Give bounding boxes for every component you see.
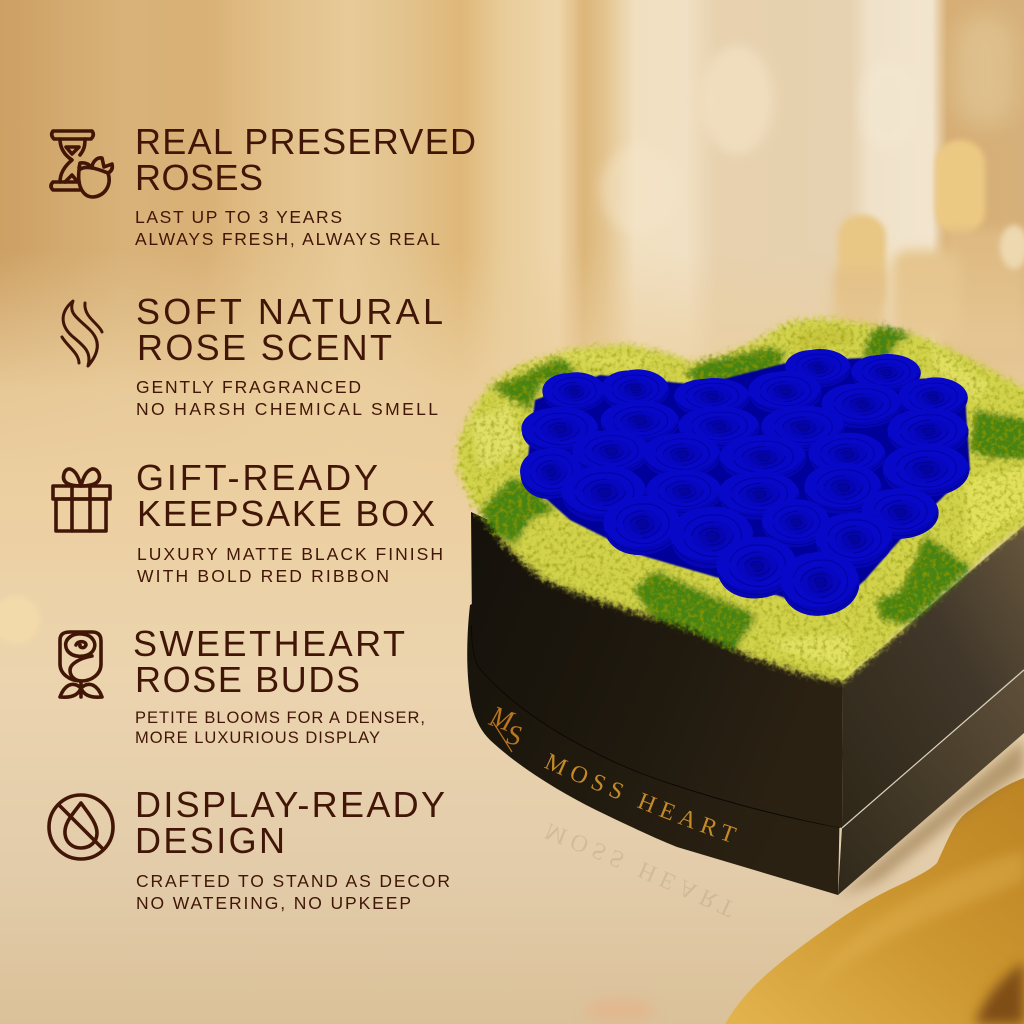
description	[135, 709, 425, 747]
box base band	[467, 600, 1024, 895]
silk: gold fabric	[725, 778, 1024, 1024]
description: CRAFTED TO STAND AS DECOR	[136, 871, 450, 891]
description: ALWAYS FRESH, ALWAYS REAL	[135, 229, 440, 249]
description: WITH BOLD RED RIBBON	[137, 566, 389, 586]
heading	[135, 784, 445, 861]
brand logo monogram: S	[504, 719, 523, 752]
heading: DISPLAY-READY	[135, 784, 445, 825]
heading: ROSE SCENT	[137, 327, 392, 368]
description: NO WATERING, NO UPKEEP	[136, 893, 411, 913]
heading	[133, 623, 405, 700]
heading	[136, 457, 435, 534]
heading	[135, 121, 476, 198]
description: NO HARSH CHEMICAL SMELL	[136, 399, 438, 419]
description: PETITE BLOOMS FOR A DENSER,	[135, 709, 425, 727]
heading: KEEPSAKE BOX	[137, 493, 435, 534]
heading: ROSES	[135, 157, 263, 198]
heading: SOFT NATURAL	[136, 291, 443, 332]
heading: SWEETHEART	[133, 623, 405, 664]
blue roses heart	[520, 349, 970, 616]
brand name on box: MOSS HEART	[544, 753, 737, 842]
description	[135, 207, 440, 249]
heading: GIFT-READY	[136, 457, 378, 498]
box reflection: mirrored brand: MOSS HEART	[544, 824, 732, 918]
icon: scent waves	[62, 301, 102, 366]
box shadow	[838, 738, 1024, 897]
icon: hourglass with rose	[51, 131, 112, 197]
description	[136, 871, 450, 913]
description	[137, 544, 443, 586]
moss ring	[457, 319, 1024, 682]
icon: rose	[60, 632, 102, 697]
feature: sweetheart rose buds	[60, 623, 425, 747]
product: heart-shaped black box	[450, 312, 1024, 895]
heading: ROSE BUDS	[135, 659, 360, 700]
heading: REAL PRESERVED	[135, 121, 476, 162]
icon: gift box	[53, 469, 110, 531]
feature: soft natural rose scent	[62, 291, 443, 419]
brand logo monogram	[485, 699, 523, 752]
feature: display-ready design	[49, 784, 450, 913]
description: LAST UP TO 3 YEARS	[135, 207, 342, 227]
description: LUXURY MATTE BLACK FINISH	[137, 544, 443, 564]
feature: gift-ready keepsake box	[53, 457, 443, 586]
heading: DESIGN	[135, 820, 285, 861]
description	[136, 377, 438, 419]
brand logo monogram: M	[485, 699, 519, 739]
description: MORE LUXURIOUS DISPLAY	[135, 729, 380, 747]
panel: feature list	[49, 121, 476, 913]
description: GENTLY FRAGRANCED	[136, 377, 361, 397]
feature: real preserved roses	[51, 121, 476, 249]
box lid body	[471, 512, 1024, 828]
icon: no water drop	[49, 795, 113, 859]
heading	[136, 291, 443, 368]
